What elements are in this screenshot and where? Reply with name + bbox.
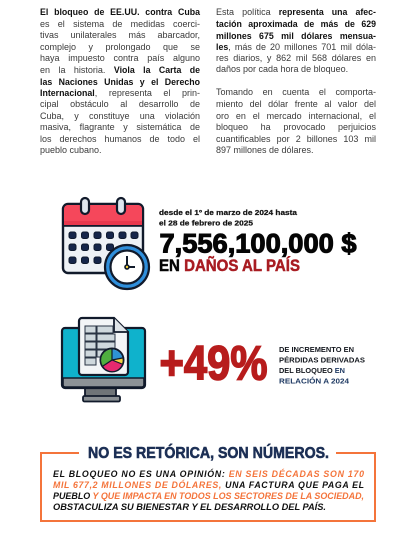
callout text: EL BLOQUEO NO ES UNA OPINIÓN: EN SEIS DÉCADAS SON 170	[53, 468, 364, 479]
icon: calendar with clock	[63, 198, 149, 289]
text block: right column figures: daños por cada hora de bloqueo.	[216, 64, 348, 74]
text block: right column figures: bloqueo ha provocado perjuicios	[216, 122, 376, 132]
text block: right column figures	[216, 7, 376, 155]
heading: damages to the country: EN DAÑOS AL PAÍS	[159, 255, 300, 275]
heading: no es retórica: NO ES RETÓRICA, SON NÚMEROS.	[88, 443, 329, 462]
text block: right column figures: oro en el mercado internacional, el	[216, 111, 376, 121]
text block: left column intro: complejo y prolongado que se	[40, 42, 200, 52]
callout text	[53, 468, 364, 512]
big figure: damages: 7,556,100,000 $	[160, 228, 356, 258]
text block: left column intro: es el sistema de medidas coerci-	[40, 19, 200, 29]
caption: increase in losses: RELACIÓN A 2024	[279, 376, 350, 386]
icon: monitor with spreadsheet and pie chart	[62, 318, 145, 402]
text block: right column figures: millones 675 mil dólares mensua-	[216, 31, 376, 41]
text block: right column figures: miento del dólar frente al valor del	[216, 99, 376, 109]
text block: left column intro: Cuba, y constituye una violación	[40, 111, 200, 121]
text block: right column figures: tación aproximada de más de 629	[216, 19, 376, 29]
text block: left column intro: Internacional, representa el prin-	[40, 88, 200, 98]
panel: callout frame	[41, 453, 375, 521]
date range caption: desde el 1º de marzo de 2024 hasta	[159, 208, 298, 217]
caption: increase in losses: DEL BLOQUEO EN	[279, 366, 345, 375]
text block: left column intro: cipal obstáculo al desarrollo de	[40, 99, 200, 109]
text block: right column figures: Esta política representa una afec-	[216, 7, 376, 17]
caption: increase in losses	[279, 345, 365, 386]
text block: left column intro: las Naciones Unidas y el Derecho	[40, 77, 200, 87]
text block: left column intro: en la historia. Viola la Carta de	[40, 65, 200, 75]
text block: right column figures: res diarios, y 862 mil 568 dólares en	[216, 53, 376, 63]
callout text: MIL 677,2 MILLONES DE DÓLARES, UNA FACTURA QUE PAGA EL	[53, 479, 364, 490]
date range caption	[159, 208, 298, 228]
callout text: PUEBLO Y QUE IMPACTA EN TODOS LOS SECTORES DE LA SOCIEDAD,	[53, 491, 364, 501]
text block: left column intro: tivas unilaterales más abarcador,	[40, 30, 200, 40]
caption: increase in losses: PÉRDIDAS DERIVADAS	[279, 356, 365, 364]
big figure: +49%: +49%	[160, 338, 268, 390]
text block: left column intro: masiva, flagrante y sistemática de	[40, 122, 200, 132]
date range caption: el 28 de febrero de 2025	[159, 218, 253, 228]
callout text: OBSTACULIZA SU BIENESTAR Y EL DESARROLLO DEL PAÍS.	[53, 502, 326, 512]
text block: left column intro	[40, 7, 200, 155]
text block: left column intro: los derechos humanos de todo el	[40, 134, 200, 144]
text block: right column figures: les, más de 20 millones 701 mil dóla-	[216, 42, 376, 52]
text block: left column intro: El bloqueo de EE.UU. contra Cuba	[40, 7, 200, 17]
text block: left column intro: pueblo cubano.	[40, 145, 102, 155]
text block: right column figures: Tomando en cuenta el comporta-	[216, 87, 376, 97]
text block: left column intro: haya impuesto contra país alguno	[40, 53, 200, 63]
text block: right column figures: cuantificables por 2 billones 103 mil	[216, 134, 376, 144]
caption: increase in losses: DE INCREMENTO EN	[279, 345, 354, 354]
text block: right column figures: 897 millones de dólares.	[216, 145, 314, 155]
